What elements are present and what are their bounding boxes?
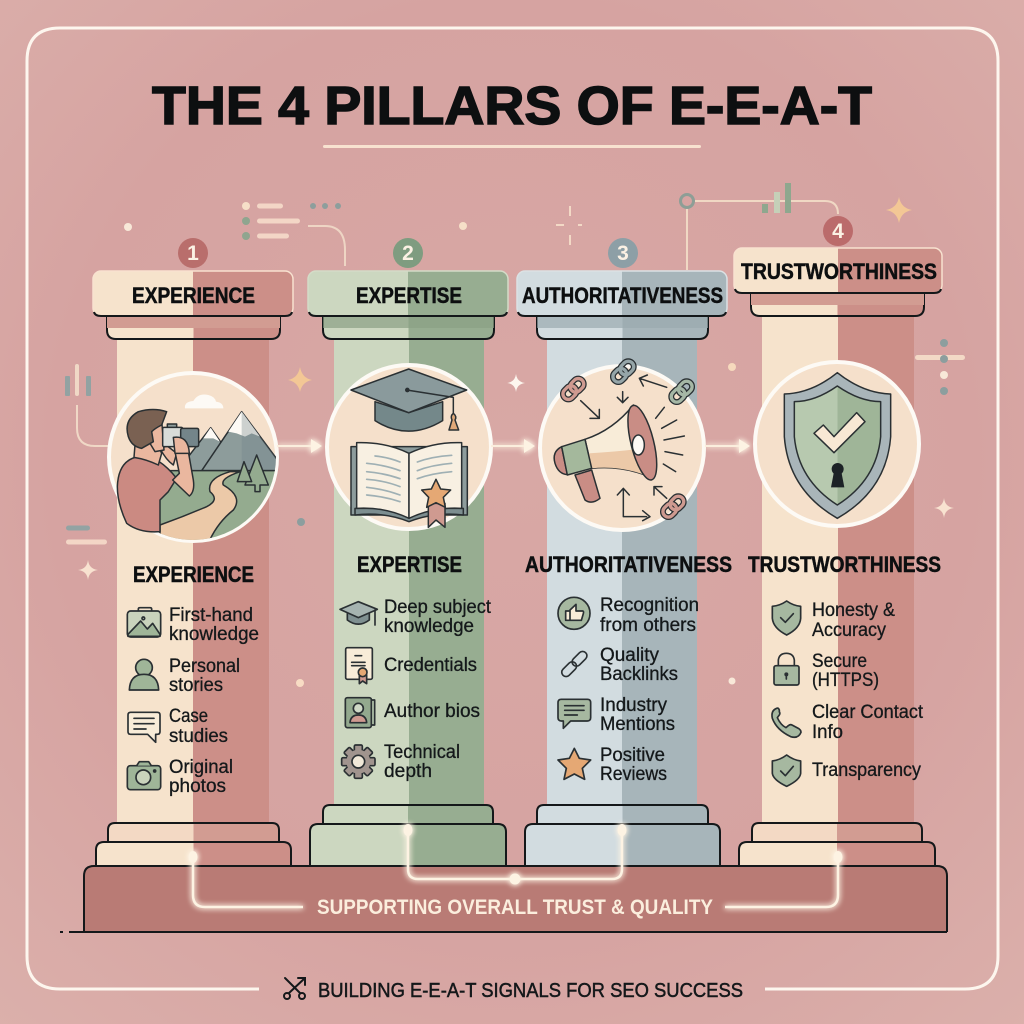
item text: recognition from others: from others [600, 615, 696, 636]
plinth 2 [310, 805, 506, 866]
item text: honesty and accuracy: Accuracy [812, 620, 886, 641]
item text: author bios: Author bios [384, 701, 480, 722]
item text: quality backlinks: Backlinks [600, 664, 678, 685]
decorative connectors and sparkles [65, 183, 965, 687]
item text: clear contact info [812, 702, 924, 743]
title underline [323, 145, 701, 148]
number badge 2: 2 [402, 242, 414, 265]
icon: small graduation cap [340, 602, 377, 625]
glowing connector lines [188, 824, 842, 907]
item text: case studies [169, 706, 228, 747]
item text: original photos: Original [169, 757, 233, 778]
item text: quality backlinks: Quality [600, 645, 659, 666]
arrow: authoritativeness to trustworthiness [705, 439, 750, 453]
capital 2 [308, 271, 508, 339]
item text: personal stories [169, 656, 240, 696]
capital 3 [517, 271, 727, 339]
arrow: expertise to authoritativeness [491, 439, 535, 453]
pillar name 1: EXPERIENCE [132, 283, 255, 308]
icon: link [560, 650, 589, 678]
pillar subheading 2: EXPERTISE [357, 552, 462, 577]
plinth 4 [739, 823, 935, 866]
list: experience items [127, 605, 259, 797]
item text: clear contact info: Clear Contact [812, 702, 924, 723]
item text: secure https: (HTTPS) [812, 670, 879, 691]
item text: original photos: photos [169, 776, 226, 797]
item text: clear contact info: Info [812, 722, 843, 743]
icon: gear [342, 745, 375, 778]
icon: comment [558, 699, 591, 728]
item text: industry mentions [600, 695, 675, 735]
icon: speech bubble [128, 712, 160, 742]
number badge 2 [393, 238, 423, 268]
panel: pillar 4 trustworthiness [734, 216, 942, 866]
icon: check shield [772, 755, 801, 786]
icon: camera [127, 762, 161, 790]
icon: star [558, 748, 591, 779]
item text: positive reviews: Positive [600, 745, 665, 766]
item text: technical depth: depth [384, 761, 432, 782]
icon: megaphone with links [540, 359, 704, 530]
panel: pillar 2 expertise [308, 238, 508, 866]
capital 1 [93, 271, 293, 339]
item text: secure https [812, 651, 879, 691]
pillar subheading 3: AUTHORITATIVENESS [525, 552, 732, 577]
icon: thumbs up [558, 597, 590, 629]
pillar subheading 4: TRUSTWORTHINESS [748, 552, 941, 577]
number badge 4 [823, 216, 853, 246]
icon: person [129, 659, 159, 690]
plinth 3 [525, 805, 720, 866]
item text: technical depth [384, 742, 460, 782]
footer text: BUILDING E-E-A-T SIGNALS FOR SEO SUCCESS [318, 980, 743, 1002]
list: trustworthiness items [772, 600, 924, 786]
capital 4 [734, 248, 942, 316]
icon: graduation cap and book [327, 365, 491, 529]
pillar subheading 1: EXPERIENCE [133, 562, 254, 587]
item text: first-hand knowledge: First-hand [169, 605, 253, 626]
title: THE 4 PILLARS OF E-E-A-T [152, 76, 872, 136]
icon: certificate [346, 648, 372, 684]
item text: industry mentions: Industry [600, 695, 667, 716]
plinth 1 [96, 823, 291, 866]
shaft 1 [117, 339, 269, 824]
item text: personal stories: stories [169, 675, 223, 696]
item text: industry mentions: Mentions [600, 714, 675, 735]
base slab [60, 866, 947, 932]
item text: case studies: studies [169, 726, 228, 747]
icon: telephone [772, 708, 801, 737]
item text: first-hand knowledge: knowledge [169, 624, 259, 645]
item text: positive reviews [600, 745, 667, 785]
item text: quality backlinks [600, 645, 678, 685]
item text: first-hand knowledge [169, 605, 259, 645]
shaft 2 [334, 339, 484, 809]
item text: credentials: Credentials [384, 655, 477, 676]
list: expertise items [340, 597, 492, 782]
number badge 1: 1 [187, 242, 199, 265]
number badge 1 [178, 238, 208, 268]
icon: small shield [772, 601, 801, 635]
icon: footer crossed arrows [284, 978, 305, 999]
pillar name 3: AUTHORITATIVENESS [522, 283, 723, 308]
item text: deep subject knowledge: knowledge [384, 616, 474, 637]
panel: pillar 1 experience [93, 238, 293, 866]
icon: padlock [774, 653, 799, 685]
number badge 3 [608, 238, 638, 268]
item text: personal stories: Personal [169, 656, 240, 677]
shaft 3 [547, 339, 697, 809]
pillar name 2: EXPERTISE [356, 283, 462, 308]
number badge 3: 3 [617, 242, 629, 265]
list: authoritativeness items [558, 595, 699, 785]
item text: technical depth: Technical [384, 742, 460, 763]
item text: original photos [169, 757, 233, 797]
item text: deep subject knowledge: Deep subject [384, 597, 492, 618]
icon: shield with check and keyhole [755, 362, 919, 526]
item text: case studies: Case [169, 706, 208, 727]
shaft 4 [762, 316, 914, 824]
icon: image case [127, 608, 161, 637]
pillar name 4: TRUSTWORTHINESS [741, 259, 937, 284]
base caption: SUPPORTING OVERALL TRUST & QUALITY [317, 896, 713, 919]
item text: honesty and accuracy: Honesty & [812, 600, 895, 621]
item text: transparency: Transparency [812, 760, 921, 781]
item text: deep subject knowledge [384, 597, 492, 637]
item text: secure https: Secure [812, 651, 867, 672]
item text: recognition from others [600, 595, 699, 636]
arrow: experience to expertise [277, 439, 322, 453]
item text: honesty and accuracy [812, 600, 895, 641]
icon: author profile [345, 698, 375, 728]
icon: photographer and mountains [109, 373, 280, 543]
panel: pillar 3 authoritativeness [517, 238, 732, 866]
item text: recognition from others: Recognition [600, 595, 699, 616]
item text: positive reviews: Reviews [600, 764, 667, 785]
number badge 4: 4 [832, 220, 844, 243]
